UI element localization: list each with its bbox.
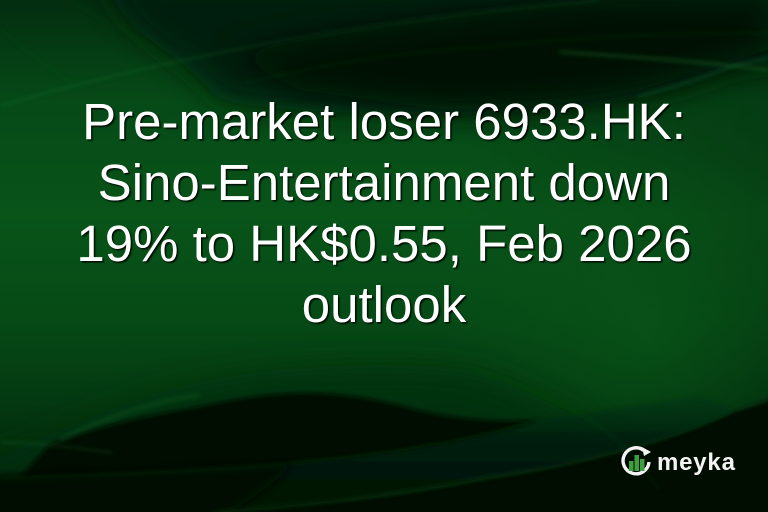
- title: outlook: [302, 276, 466, 333]
- icon: circular arrow with bars: [623, 447, 651, 474]
- title: 19% to HK$0.55, Feb 2026: [76, 215, 692, 272]
- title: Pre-market loser 6933.HK:: [82, 93, 686, 150]
- bottom dark swoosh: [0, 365, 700, 512]
- wordmark: meyka: [657, 449, 736, 476]
- top dark swoosh: [100, 0, 768, 114]
- logo: meyka: [621, 446, 736, 476]
- title: [76, 93, 692, 333]
- title: Sino-Entertainment down: [98, 154, 670, 211]
